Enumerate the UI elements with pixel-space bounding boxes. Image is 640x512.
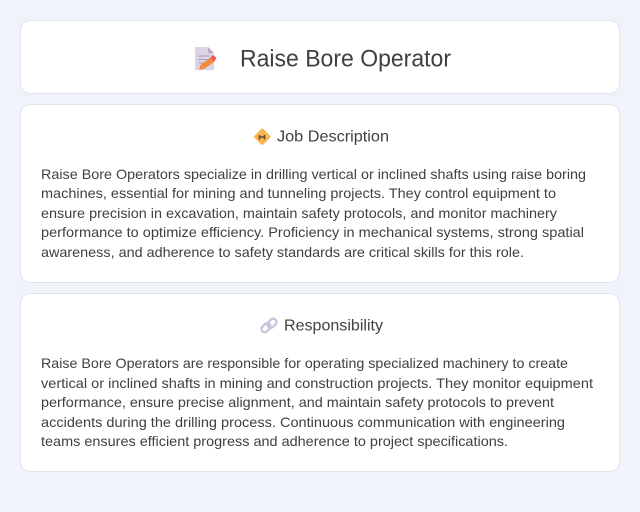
responsibility text: accidents during the drilling process. Continuous communication with engineering: [41, 414, 565, 430]
responsibility text: teams ensures efficient progress and adherence to project specifications.: [41, 433, 508, 449]
heading: job description: Job Description: [277, 128, 389, 146]
job description text: Raise Bore Operators specialize in drilling vertical or inclined shafts using raise boring: [41, 166, 586, 182]
job description text: ensure precision in excavation, maintain safety protocols, and monitor machinery: [41, 205, 557, 221]
job description text: awareness, and adherence to safety standards are critical skills for this role.: [41, 244, 524, 260]
title: Raise Bore Operator: [240, 46, 451, 72]
responsibility text: performance, ensure precise alignment, and maintain safety protocols to prevent: [41, 394, 554, 410]
icon: document with pencil: [195, 47, 216, 70]
panel: title card: [20, 20, 620, 94]
panel: responsibility card: [20, 293, 620, 472]
icon: construction sign: [253, 128, 271, 146]
panel: job description card: [20, 104, 620, 283]
job description text: [41, 166, 586, 260]
responsibility text: vertical or inclined shafts in mining and construction projects. They monitor equipment: [41, 375, 593, 391]
icon: chain link: [260, 317, 278, 334]
job description text: performance to optimize efficiency. Proficiency in mechanical systems, strong spatial: [41, 224, 584, 240]
responsibility text: Raise Bore Operators are responsible for operating specialized machinery to create: [41, 355, 568, 371]
job description text: machines, essential for mining and tunneling projects. They control equipment to: [41, 185, 556, 201]
responsibility text: [41, 355, 593, 449]
heading: responsibility: Responsibility: [284, 318, 383, 334]
